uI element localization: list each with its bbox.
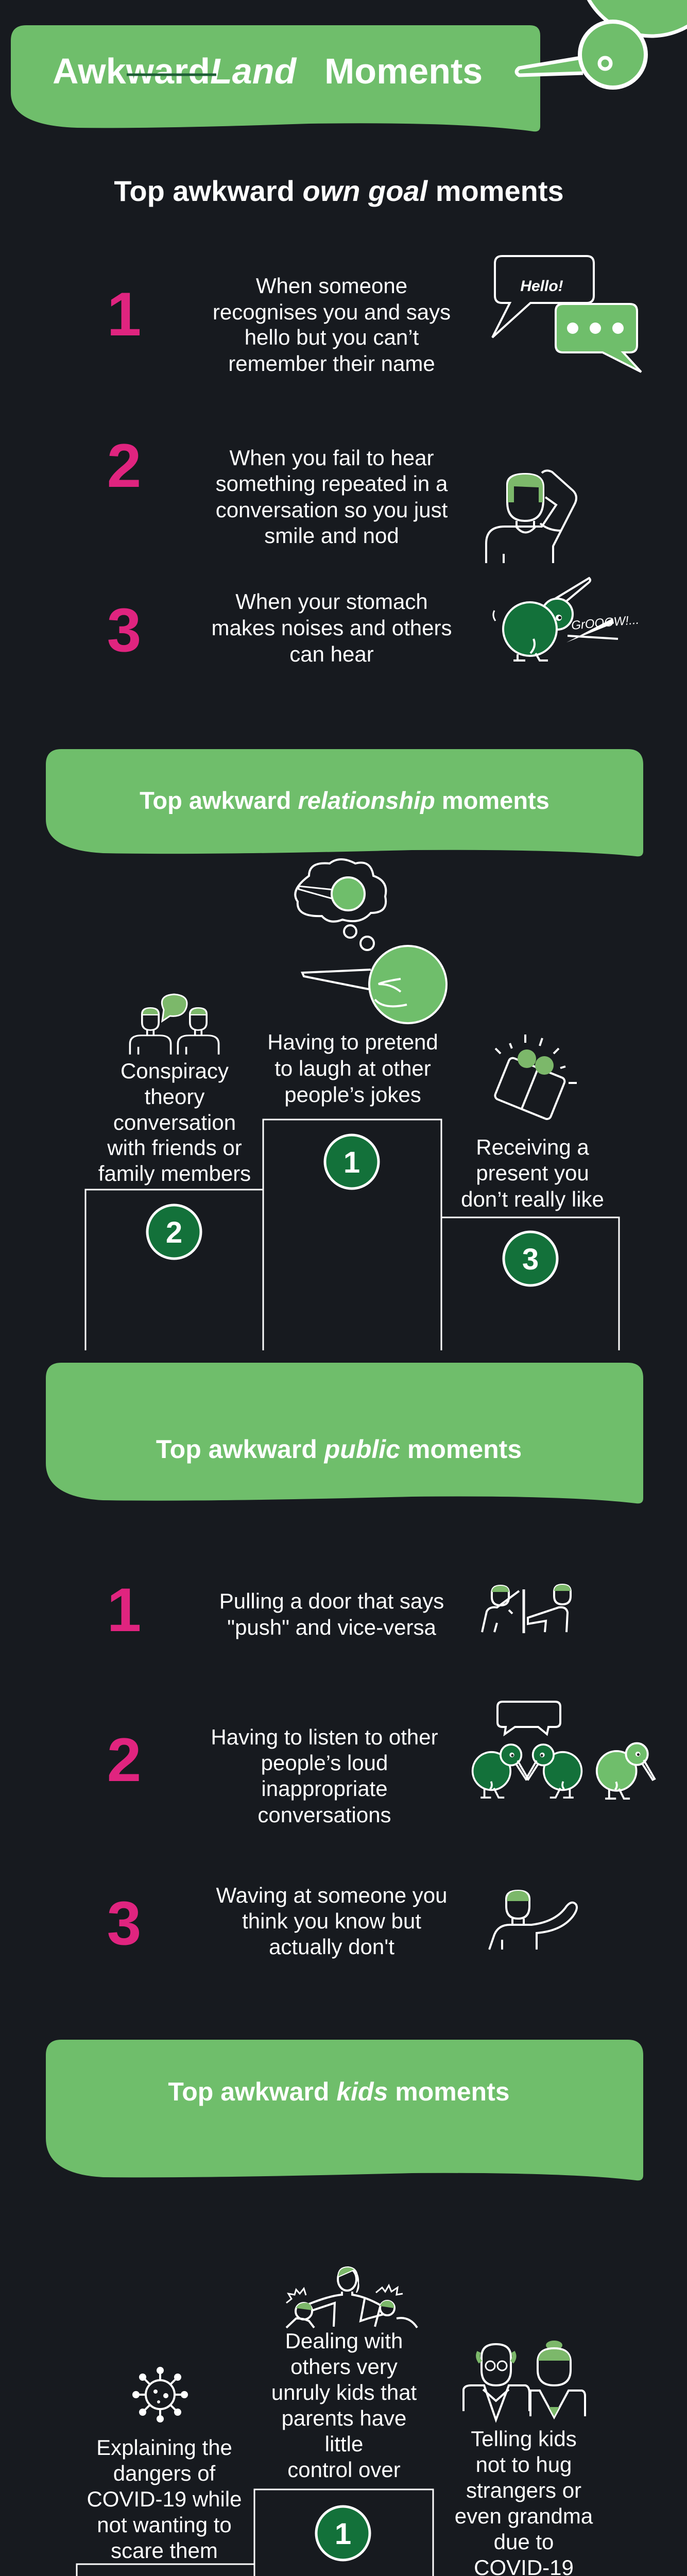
text: kids 1: parents have [282,2406,406,2430]
icon: person scratching head [486,470,576,563]
public item 2: conversations [257,1803,391,1827]
text: kids 1: control over [287,2458,401,2482]
text: relationship 3: present you [476,1161,589,1185]
text: kids 2: dangers of [113,2461,216,2485]
text: kids 2: Explaining the [96,2435,232,2460]
heading: own goal: Top awkward own goal moments [114,175,564,207]
own goal item 2: 2 [107,431,141,500]
own goal item 3: When your stomach [235,589,428,614]
public item 2: 2 [107,1725,141,1794]
text: relationship 2: theory [145,1084,204,1109]
text: relationship 2: with friends or [107,1136,242,1160]
icon: two people chatting [130,994,219,1055]
podium: relationship [85,1120,619,1350]
text: kids 1: little [325,2432,363,2456]
icon: hello speech bubbles: Hello! [520,278,563,295]
icon: kiwi stomach growl: GrOOOW!... [571,613,640,633]
own goal item 3: makes noises and others [212,616,452,640]
own goal item 1: recognises you and says [213,300,451,324]
text: kids 1: Dealing with [285,2329,403,2353]
icon: waving person [489,1891,577,1950]
text: relationship 3: don’t really like [461,1187,604,1211]
icon: mother with unruly kids [286,2267,417,2328]
icon: grandparents [463,2341,585,2420]
icon: gift [494,1035,577,1120]
public item 2: people’s loud [261,1751,388,1775]
own goal item 2: smile and nod [264,523,399,548]
public item 2: Having to listen to other [211,1725,438,1749]
own goal item 3 [107,589,452,666]
rank 1: 1 [343,1146,360,1179]
public item 3: actually don't [269,1935,394,1959]
text: kids 1: others very [290,2354,398,2379]
own goal item 3: can hear [289,642,374,666]
text: kids 2: not wanting to [97,2513,232,2537]
public item 2 [107,1725,438,1827]
public item 2: inappropriate [261,1776,388,1801]
icon: virus [133,2368,187,2421]
public item 1: Pulling a door that says [219,1589,444,1613]
text: kids 3: Telling kids [471,2427,577,2451]
rank 1 [316,2506,370,2560]
public item 3: think you know but [242,1909,421,1933]
text: relationship 2: conversation [113,1110,236,1134]
banner: public [46,1363,643,1503]
own goal item 2: When you fail to hear [230,446,434,470]
rank 2: 2 [166,1216,182,1249]
podium: kids [77,2489,610,2576]
text: relationship 2: family members [98,1161,251,1185]
banner: kids: Top awkward kids moments [168,2077,510,2106]
banner: kids [46,2040,643,2180]
own goal item 2: conversation so you just [216,498,448,522]
title banner [11,25,540,131]
icon: thought bubble and laughing kiwi [295,859,446,1023]
rank 3 [504,1232,557,1285]
banner: relationship [46,749,643,856]
public item 3: 3 [107,1889,141,1958]
public item 1: "push" and vice-versa [227,1615,436,1639]
own goal item 2 [107,431,448,548]
title text: AwkwardLand [53,51,297,91]
public item 1: 1 [107,1575,141,1645]
own goal item 1 [107,274,451,376]
rank 1 [325,1135,379,1189]
own goal item 3: 3 [107,596,141,665]
text: relationship 3: Receiving a [476,1135,589,1159]
own goal item 2: something repeated in a [216,471,448,496]
icon: door push pull [482,1585,571,1633]
own goal item 1: 1 [107,280,141,349]
text: kids 3: not to hug [476,2452,572,2477]
text: relationship 1: Having to pretend [267,1030,438,1054]
banner: public: Top awkward public moments [156,1435,522,1464]
own goal item 1: hello but you can’t [245,325,419,349]
text: kids 2: scare them [111,2538,218,2563]
own goal item 1: remember their name [228,351,435,376]
text: kids 1: unruly kids that [271,2380,417,2404]
own goal item 1: When someone [256,274,407,298]
icon: kiwi mascot top right [517,0,687,88]
icon: three kiwis talking [473,1702,655,1799]
public item 3: Waving at someone you [216,1883,448,1907]
banner: relationship: Top awkward relationship moments [140,787,549,814]
icon: hello speech bubbles [492,256,641,372]
text: kids 3: strangers or [466,2478,581,2502]
rank 1: 1 [335,2517,351,2551]
text: kids 2: COVID-19 while [87,2487,242,2511]
public item 1 [107,1575,444,1645]
text: relationship 1: to laugh at other [274,1056,431,1080]
text: relationship 1: people’s jokes [284,1082,421,1107]
public item 3 [107,1883,448,1959]
icon: kiwi stomach growl [493,578,640,660]
rank 2 [147,1205,201,1259]
rank 3: 3 [522,1243,539,1276]
text: kids 3: due to [494,2530,554,2554]
text: kids 3: even grandma [455,2504,593,2528]
text: relationship 2: Conspiracy [121,1059,229,1083]
title banner: Moments [324,51,483,91]
